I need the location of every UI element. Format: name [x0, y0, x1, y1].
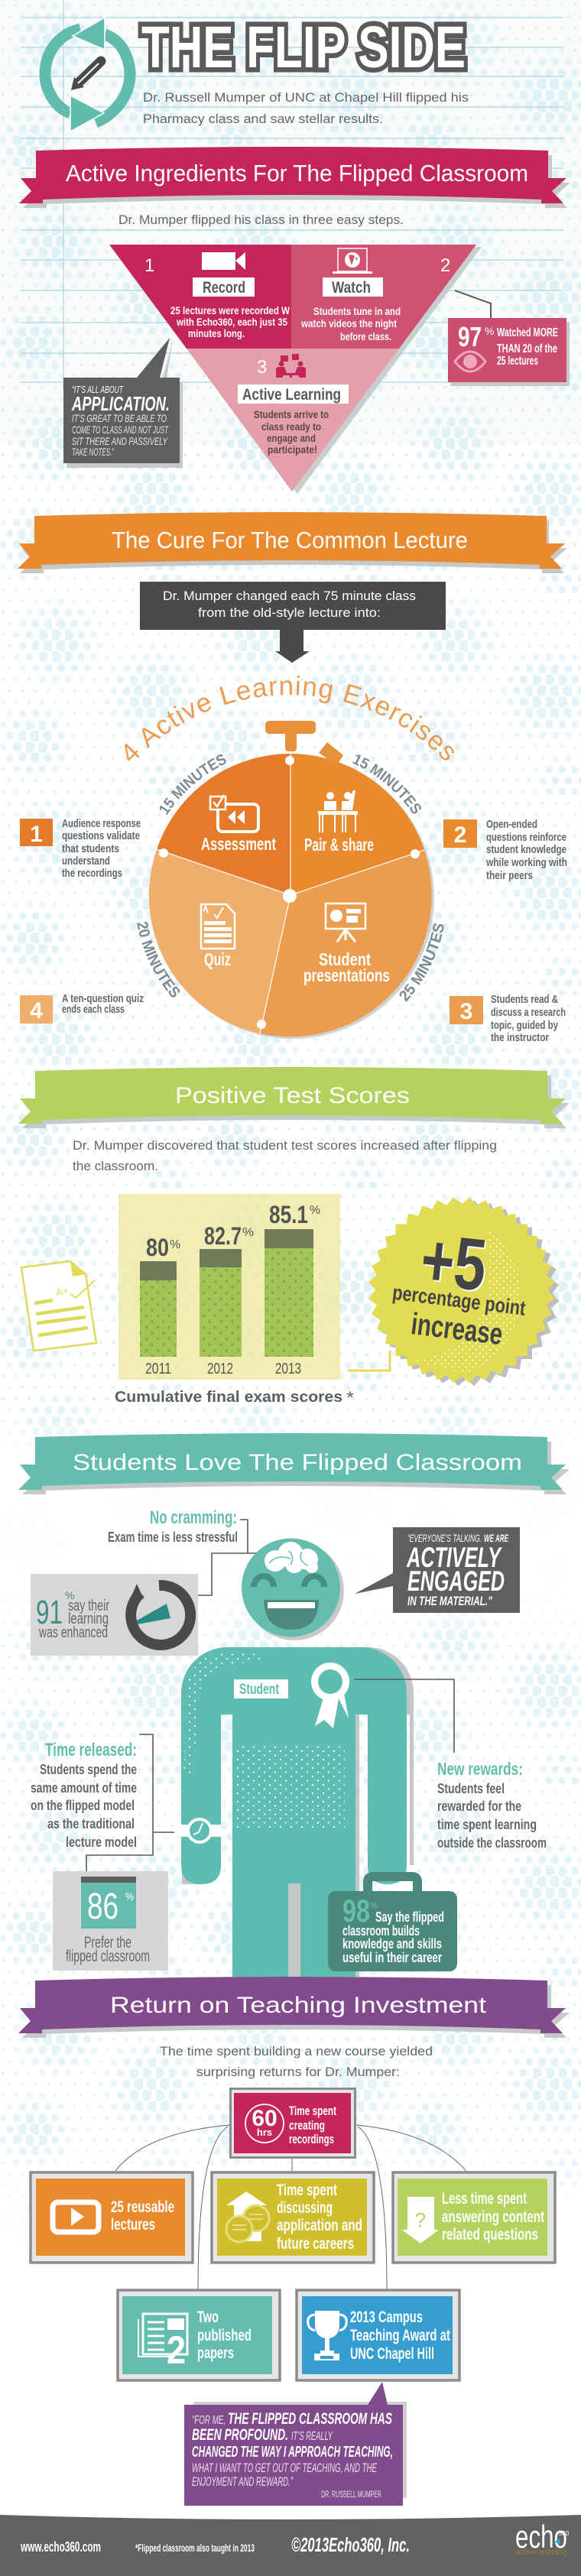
exercise 2 note: 2 [454, 822, 466, 848]
segment: assessment [157, 754, 290, 895]
box: discussing application: discussing [277, 2199, 333, 2217]
note: time released: Time released: [45, 1740, 137, 1760]
icon: wristwatch [181, 1818, 221, 1844]
panel: briefcase 98 percent: % [370, 1900, 378, 1911]
intro text: test scores: Dr. Mumper discovered that student test scores increased after flipping [73, 1139, 497, 1153]
box: discussing application: Time spent [277, 2182, 337, 2199]
text panel with down arrow [140, 582, 446, 663]
panel: 91 percent learning enhanced: say their [68, 1598, 109, 1614]
banner: cure for the common lecture [18, 512, 567, 573]
panel: 86 percent prefer: 86 [87, 1887, 118, 1927]
banner: cure for the common lecture: The Cure For The Common Lecture [112, 527, 468, 553]
panel: briefcase 98 percent: useful in their career [342, 1950, 442, 1965]
note: no cramming: Exam time is less stressful [108, 1530, 238, 1545]
bar: 2013 [265, 1201, 320, 1377]
callout: application quote: IT’S GREAT TO BE ABLE TO [72, 412, 167, 424]
exercise 3 note: the instructor [491, 1031, 549, 1044]
connectors from centre box [115, 2125, 469, 2289]
segment: student presentations [260, 850, 432, 1037]
icon: graded paper [21, 1261, 96, 1351]
bar: 2011: 2011 [145, 1361, 171, 1377]
callout: 97 percent watched: % [485, 325, 494, 337]
panel: 86 percent prefer: % [125, 1890, 134, 1903]
exercise 4 note: ends each class [62, 1003, 125, 1016]
footer [0, 2515, 581, 2576]
box: 60 hours: 60 [252, 2106, 278, 2131]
step 1: record: 25 lectures were recorded W [170, 304, 290, 316]
subtitle [143, 90, 469, 126]
badge: plus 5 percentage point increase [368, 1197, 559, 1386]
callout: application quote: COME TO CLASS AND NOT JUST [72, 423, 169, 436]
exercise 4 note: 4 [30, 998, 43, 1024]
note: new rewards: rewarded for the [437, 1799, 521, 1814]
time labels on stopwatch [137, 754, 443, 1002]
box: 60 hours: recordings [289, 2132, 334, 2146]
callout: profound quote: “FOR ME, [192, 2414, 226, 2427]
note: time released: lecture model [66, 1835, 137, 1850]
note: new rewards: Students feel [437, 1781, 505, 1796]
callout: actively engaged quote: ACTIVELY [406, 1542, 502, 1573]
box: less time answering: answering content [442, 2208, 544, 2226]
note: time released: as the traditional [47, 1816, 135, 1831]
bar: 2012: % [242, 1226, 254, 1239]
icon: graded paper: A+ [54, 1284, 70, 1299]
step 3: active learning: class ready to [261, 420, 321, 433]
box: two published papers: papers [197, 2344, 234, 2362]
exercise 4 note [20, 992, 144, 1024]
heading: 4 active learning exercises (curved): 4 Active Learning Exercises [124, 676, 454, 761]
callout: actively engaged quote: ENGAGED [407, 1565, 505, 1597]
segment: pair and share: Pair & share [304, 835, 374, 855]
panel: 91 percent learning enhanced: % [65, 1589, 74, 1601]
panel: 91 percent learning enhanced: was enhanced [38, 1624, 108, 1641]
exercise 2 note: Open-ended [486, 818, 537, 831]
panel: briefcase 98 percent: Say the flipped [375, 1909, 444, 1925]
bar: 2011: % [170, 1238, 180, 1251]
subtitle: Pharmacy class and saw stellar results. [143, 112, 383, 126]
text panel with down arrow: Dr. Mumper changed each 75 minute class [163, 589, 416, 603]
intro text: returns: surprising returns for Dr. Mumper: [196, 2065, 400, 2079]
box: teaching award: 2013 Campus [350, 2308, 423, 2326]
note: new rewards: outside the classroom [437, 1835, 547, 1851]
step 3: active learning: Active Learning [242, 386, 341, 404]
bar: 2013: % [310, 1204, 320, 1217]
callout: application quote [63, 338, 183, 468]
intro text: three easy steps: Dr. Mumper flipped his class in three easy steps. [118, 213, 404, 227]
callout: actively engaged quote [355, 1527, 520, 1613]
exercise 4 note: A ten-question quiz [62, 992, 144, 1005]
box: 60 hours: creating [289, 2118, 325, 2133]
box: discussing application [212, 2172, 374, 2263]
bar: 2011: 80 [146, 1234, 169, 1261]
step 3: active learning: engage and [267, 432, 316, 444]
banner: active ingredients [19, 147, 570, 208]
icon: papers: 2 [167, 2328, 186, 2373]
note: time released: same amount of time [31, 1780, 137, 1796]
subtitle: Dr. Russell Mumper of UNC at Chapel Hill flipped his [143, 90, 469, 105]
step 1: record: with Echo360, each just 35 [176, 316, 287, 328]
box: two published papers: published [197, 2327, 252, 2344]
box: teaching award: Teaching Award at [350, 2327, 450, 2344]
note: no cramming: No cramming: [150, 1507, 237, 1528]
exercise 3 note: topic, guided by [491, 1019, 559, 1032]
bar: 2012: 2012 [207, 1361, 233, 1377]
segment: student presentations: presentations [303, 965, 390, 985]
step 2: watch: watch videos the night [300, 317, 397, 329]
panel: briefcase 98 percent [328, 1877, 457, 1971]
callout: profound quote: IT’S REALLY [291, 2430, 333, 2443]
panel: 91 percent learning enhanced: learning [68, 1611, 109, 1627]
note: time released: Students spend the [40, 1762, 137, 1777]
step 2: watch: 2 [440, 255, 450, 276]
icon: students at desk [318, 790, 358, 832]
note: time released: on the flipped model [31, 1798, 135, 1813]
exercise 1 note: understand [62, 855, 110, 868]
figure: student body [181, 1647, 414, 1977]
icon: eye [455, 352, 485, 371]
step 1: record [144, 252, 290, 339]
badge: plus 5 percentage point increase: +5 [417, 1218, 490, 1306]
title: THE FLIP SIDE [141, 15, 466, 80]
note: no cramming [108, 1507, 281, 1595]
step 3: active learning [238, 354, 349, 456]
callout: 97 percent watched: 97 [458, 321, 482, 352]
head: smiling face [242, 1538, 344, 1640]
banner: active ingredients: Active Ingredients For The Flipped Classroom [66, 160, 528, 187]
callout: profound quote: THE FLIPPED CLASSROOM HAS [228, 2410, 392, 2428]
segment: student presentations: Student [319, 949, 371, 969]
panel: briefcase 98 percent: classroom builds [342, 1923, 420, 1938]
box: less time answering: Less time spent [442, 2190, 527, 2208]
bar: 2012: 82.7 [204, 1222, 242, 1250]
banner: positive test scores: Positive Test Scores [175, 1083, 410, 1108]
logo: echo: active learning [515, 2548, 567, 2557]
exercise 3 note: Students read & [491, 993, 558, 1006]
step 1: record: Record [203, 279, 245, 297]
footer: www.echo360.com [20, 2539, 101, 2555]
intro text: returns: The time spent building a new course yielded [160, 2045, 433, 2059]
step 2: watch: before class. [340, 330, 391, 342]
icon: megaphone ring [131, 1584, 190, 1645]
callout: 97 percent watched [448, 290, 570, 386]
footer: *Flipped classroom also taught in 2013 [135, 2542, 255, 2554]
box: two published papers [118, 2290, 280, 2380]
segment: quiz [149, 849, 290, 1033]
note: new rewards: New rewards: [437, 1759, 523, 1779]
note: time released [31, 1734, 174, 1871]
step 3: active learning: participate! [268, 443, 317, 456]
bar: 2013: 2013 [275, 1361, 301, 1377]
exercise 1 note: the recordings [62, 867, 122, 880]
box: less time answering: ? [415, 2208, 426, 2231]
box: discussing application: future careers [277, 2235, 354, 2253]
segment: assessment: Assessment [201, 834, 276, 854]
intro text: test scores [73, 1139, 497, 1173]
step 3: active learning: 3 [257, 357, 267, 378]
callout: actively engaged quote: IN THE MATERIAL.” [407, 1594, 492, 1608]
exercise 2 note [443, 818, 567, 882]
banner: return on teaching investment: Return on Teaching Investment [110, 1993, 487, 2018]
callout: application quote: “IT’S ALL ABOUT [72, 384, 124, 395]
box: less time answering: related questions [442, 2226, 538, 2243]
exercise 1 note: 1 [30, 822, 43, 847]
icon: flip arrows with pencil [45, 18, 130, 131]
bar: 2011 [140, 1234, 180, 1377]
panel: 91 percent learning enhanced [31, 1574, 198, 1656]
box: 25 reusable lectures: 25 reusable [111, 2198, 174, 2216]
banner: positive test scores [18, 1067, 570, 1128]
panel: briefcase 98 percent: knowledge and skills [342, 1936, 442, 1951]
intro text: returns [160, 2045, 433, 2079]
callout: profound quote: ENJOYMENT AND REWARD.” [192, 2474, 294, 2489]
exercise 1 note: Audience response [62, 817, 141, 830]
badge: plus 5 percentage point increase: +5 [418, 1220, 492, 1309]
connector [348, 1351, 390, 1371]
icon: quiz sheet [201, 904, 235, 949]
panel: 86 percent prefer: Prefer the [84, 1934, 131, 1951]
box: 60 hours: Time spent [289, 2104, 336, 2118]
box: 60 hours: hrs [257, 2127, 272, 2138]
icon: brain [265, 1542, 318, 1573]
icon: rewind check [210, 795, 258, 832]
callout: profound quote [184, 2382, 407, 2506]
callout: profound quote: WHAT I WANT TO GET OUT OF TEACHING, AND THE [192, 2461, 377, 2475]
box: 25 reusable lectures: lectures [111, 2216, 155, 2234]
icon: rosette [311, 1663, 349, 1728]
time labels on stopwatch: 25 MINUTES [399, 923, 443, 1002]
box: 60 hours [231, 2088, 355, 2157]
box: 25 reusable lectures [31, 2172, 193, 2263]
note: new rewards [354, 1679, 547, 1851]
bar chart: final exam scores [118, 1194, 340, 1380]
banner: students love [18, 1433, 570, 1494]
step 2: watch: Watch [332, 279, 371, 297]
callout: application quote: TAKE NOTES.” [72, 446, 115, 458]
banner: students love: Students Love The Flipped Classroom [73, 1450, 522, 1475]
callout: application quote: SIT THERE AND PASSIVELY [72, 435, 168, 447]
chart caption: Cumulative final exam scores [115, 1389, 342, 1406]
footer: ©2013Echo360, Inc. [291, 2533, 410, 2556]
logo: echo: 360 [559, 2530, 570, 2537]
box: less time answering [393, 2172, 555, 2263]
name tag: student: Student [239, 1682, 279, 1698]
step 2: watch: Students tune in and [313, 305, 401, 317]
segment: quiz: Quiz [204, 949, 231, 969]
callout: 97 percent watched: 25 lectures [497, 355, 538, 368]
note: new rewards: time spent learning [437, 1817, 537, 1832]
time labels on stopwatch: 15 MINUTES [352, 754, 421, 814]
bar: 2012 [200, 1222, 254, 1377]
intro text: test scores: the classroom. [73, 1160, 158, 1173]
segment: pair and share [290, 754, 424, 895]
badge: plus 5 percentage point increase: increase [409, 1307, 505, 1351]
chart: stopwatch with four segments [149, 721, 434, 1039]
exercise 1 note [20, 817, 141, 880]
panel: 86 percent prefer: flipped classroom [66, 1948, 150, 1965]
chart: three-step triangle [109, 245, 482, 494]
panel: 91 percent learning enhanced: 91 [36, 1594, 63, 1631]
chart caption: * [346, 1388, 355, 1407]
callout: profound quote: BEEN PROFOUND. [192, 2426, 288, 2444]
box: teaching award: UNC Chapel Hill [350, 2345, 434, 2363]
step 2: watch [300, 248, 450, 342]
box: two published papers: Two [197, 2308, 219, 2326]
time labels on stopwatch: 20 MINUTES [137, 922, 180, 998]
time labels on stopwatch: 15 MINUTES [160, 754, 226, 815]
callout: application quote: APPLICATION. [71, 392, 170, 415]
callout: profound quote: CHANGED THE WAY I APPROACH TEACHING, [192, 2444, 393, 2461]
step 1: record: minutes long. [188, 327, 245, 339]
step 1: record: 1 [144, 255, 154, 276]
panel: 86 percent prefer [53, 1871, 168, 1971]
step 3: active learning: Students arrive to [254, 408, 329, 420]
exercise 3 note [450, 993, 566, 1044]
box: teaching award [297, 2290, 459, 2380]
text panel with down arrow: from the old-style lecture into: [198, 605, 381, 620]
bar: 2013: 85.1 [269, 1201, 308, 1228]
exercise 3 note: 3 [460, 999, 472, 1024]
callout: profound quote: DR. RUSSELL MUMPER [321, 2489, 381, 2500]
exercise 1 note: that students [62, 842, 119, 855]
icon: trophy [308, 2311, 346, 2360]
exercise 1 note: questions validate [62, 829, 140, 842]
icon: papers [138, 2314, 187, 2373]
box: discussing application: application and [277, 2217, 362, 2234]
badge: plus 5 percentage point increase: percentage point [391, 1281, 527, 1320]
callout: actively engaged quote: “EVERYONE’S TALKING.WE ARE [407, 1532, 508, 1544]
banner: return on teaching investment [18, 1977, 570, 2038]
panel: briefcase 98 percent: 98 [342, 1893, 370, 1929]
icon: presentation board [326, 904, 365, 942]
exercise 2 note: their peers [486, 869, 533, 882]
